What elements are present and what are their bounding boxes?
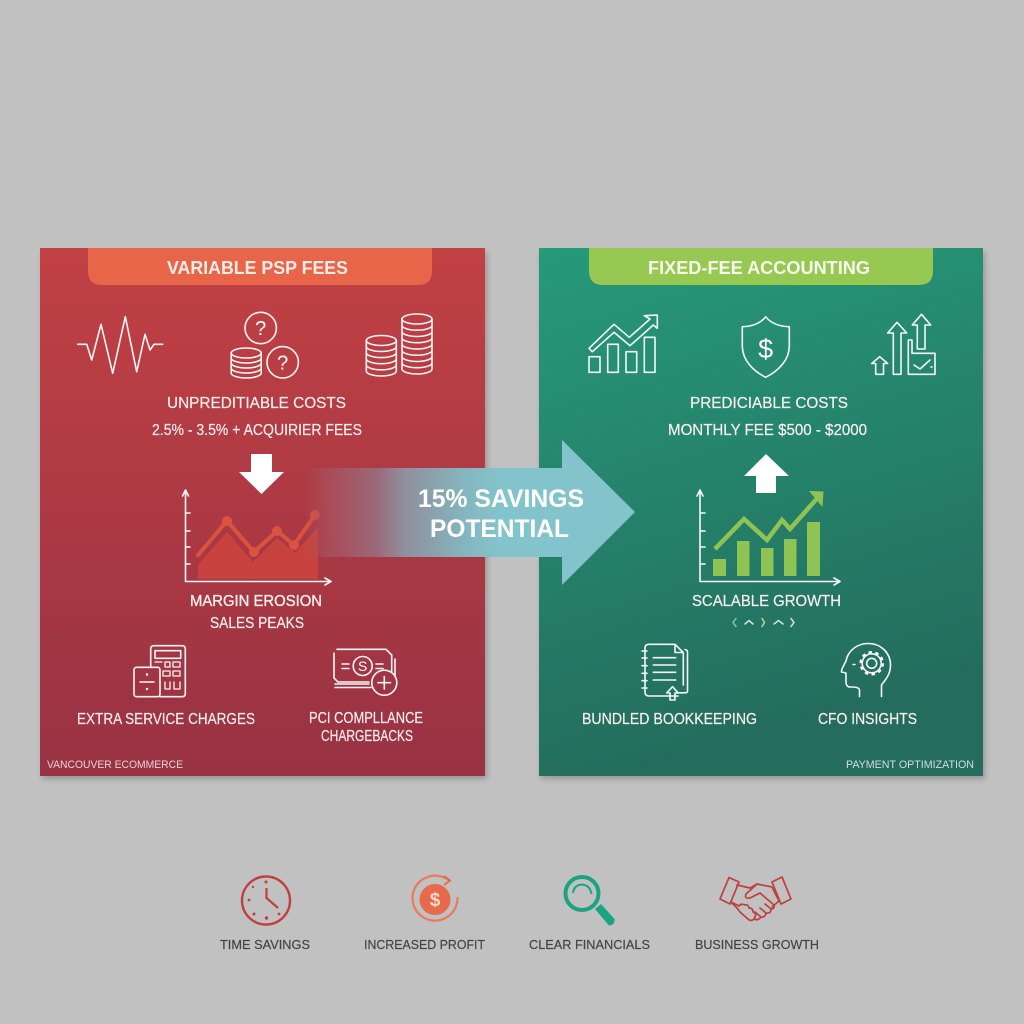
text: predictable costs: PREDICIABLE COSTS — [690, 395, 848, 412]
heading: fixed-fee accounting — [589, 248, 933, 285]
footer: payment optimization: PAYMENT OPTIMIZATION — [846, 759, 974, 771]
icon: coins with question marks: ? — [277, 352, 288, 374]
label: CFO insights: CFO INSIGHTS — [818, 711, 917, 728]
benefit: increased profit — [364, 876, 485, 952]
benefit: time savings — [220, 876, 310, 952]
text: scalable growth: SCALABLE GROWTH — [692, 593, 841, 610]
icon: calculator — [134, 646, 185, 697]
text: monthly fee: MONTHLY FEE $500 - $2000 — [668, 422, 867, 439]
icon: banknote with plus — [334, 649, 397, 695]
footer: Vancouver ecommerce: VANCOUVER ECOMMERCE — [47, 759, 183, 771]
label: business growth: BUSINESS GROWTH — [695, 937, 819, 952]
icon: coins with question marks — [231, 312, 298, 378]
icon: shield with dollar — [742, 317, 789, 377]
icon: coin stacks — [366, 314, 432, 376]
heading: variable PSP fees — [88, 248, 432, 285]
label: PCI compliance: PCI COMPLLANCE — [309, 710, 423, 727]
chart: margin erosion — [182, 490, 331, 585]
icon: banknote with plus: S — [358, 658, 367, 674]
icon: shield with dollar: $ — [758, 334, 773, 364]
label: time savings: TIME SAVINGS — [220, 937, 310, 952]
arrow: up — [744, 454, 789, 493]
icon: handshake — [720, 877, 791, 920]
text: margin erosion: MARGIN EROSION — [190, 593, 322, 610]
icon: magnifier — [566, 877, 615, 926]
label: extra service charges: EXTRA SERVICE CHARGES — [77, 711, 255, 728]
label: clear financials: CLEAR FINANCIALS — [529, 937, 650, 952]
text: 15% savings: 15% SAVINGS — [418, 485, 584, 513]
text: sales peaks: SALES PEAKS — [210, 615, 304, 632]
panel: fixed-fee accounting — [539, 248, 985, 779]
arrow: savings potential — [305, 440, 635, 585]
icon: coins with question marks: ? — [255, 318, 266, 340]
text: unpredictable costs: UNPREDITIABLE COSTS — [167, 395, 346, 412]
icon: dollar coin with arrow: $ — [430, 890, 441, 911]
icon: clock — [242, 876, 290, 924]
text: percentage fees: 2.5% - 3.5% + ACQUIRIER FEES — [152, 422, 362, 439]
heading: fixed-fee accounting: FIXED-FEE ACCOUNTING — [648, 257, 870, 278]
label: bundled bookkeeping: BUNDLED BOOKKEEPING — [582, 711, 757, 728]
chart: scalable growth — [697, 490, 840, 585]
icon: small chevrons — [733, 618, 794, 626]
icon: rising bar chart — [589, 315, 657, 372]
label: increased profit: INCREASED PROFIT — [364, 937, 485, 952]
heading: variable PSP fees: VARIABLE PSP FEES — [167, 257, 348, 278]
icon: up arrows with checkbox — [872, 314, 935, 374]
label: chargebacks: CHARGEBACKS — [321, 728, 413, 745]
arrow: down — [239, 454, 284, 494]
text: potential: POTENTIAL — [430, 515, 569, 543]
benefit: clear financials — [529, 877, 650, 952]
icon: volatility pulse — [78, 317, 163, 373]
icon: notebook — [642, 644, 688, 700]
panel: variable PSP fees — [40, 248, 487, 779]
benefit: business growth — [695, 877, 819, 952]
icon: head with gear — [841, 644, 890, 696]
